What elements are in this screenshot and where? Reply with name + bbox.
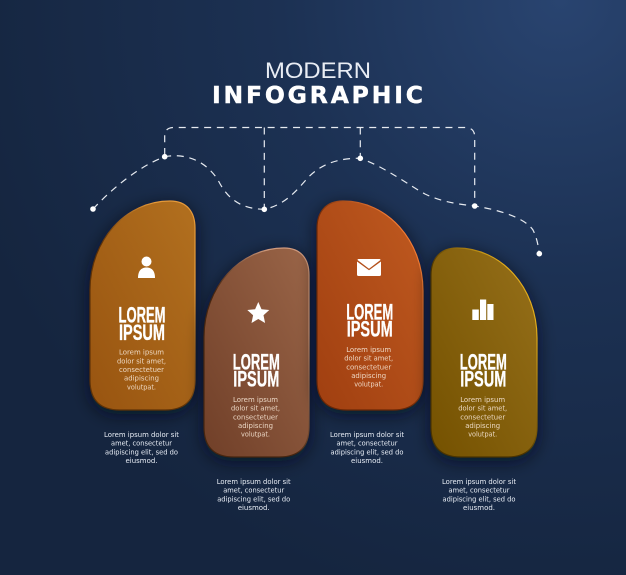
title line: INFOGRAPHIC: INFOGRAPHIC	[212, 81, 423, 109]
title line: MODERN: MODERN	[265, 58, 371, 83]
card 2 heading: LOREM	[233, 349, 280, 374]
panel: card 4	[431, 248, 537, 461]
card 4 heading: IPSUM	[460, 367, 506, 392]
caption under card 2: Lorem ipsum dolor sit	[217, 477, 291, 486]
card 3 heading: LOREM	[346, 299, 393, 324]
card 1 heading: IPSUM	[119, 320, 165, 345]
card 2 heading	[233, 349, 280, 392]
card 1 heading	[118, 303, 166, 345]
caption under card 4: Lorem ipsum dolor sit	[442, 477, 516, 486]
caption under card 4: adipiscing elit, sed do	[442, 494, 516, 503]
caption under card 2: eiusmod.	[238, 503, 270, 512]
caption under card 3	[330, 430, 404, 465]
icon: envelope	[357, 259, 381, 276]
caption under card 2: adipiscing elit, sed do	[217, 494, 290, 503]
card 1 body text: consectetuer	[119, 365, 164, 374]
caption under card 4: eiusmod.	[463, 503, 495, 512]
timeline dots	[90, 154, 542, 256]
caption under card 3: eiusmod.	[351, 456, 383, 465]
caption under card 1	[104, 430, 179, 465]
card 4 body text: volutpat.	[468, 430, 497, 439]
card 3 body text	[344, 345, 393, 389]
caption under card 4	[442, 477, 516, 512]
card 3 body text: Lorem ipsum	[346, 345, 391, 354]
card 1 body text: volutpat.	[127, 382, 156, 391]
panel: card 2	[204, 248, 309, 461]
card 1 body text: adipiscing	[124, 374, 159, 383]
card 2 heading: IPSUM	[233, 367, 279, 392]
card 3 body text: consectetuer	[346, 362, 391, 371]
caption under card 3: amet, consectetur	[336, 439, 398, 448]
caption under card 1: Lorem ipsum dolor sit	[104, 430, 179, 439]
card 4 body text: consectetuer	[460, 412, 505, 421]
panel: card 3	[317, 201, 423, 414]
card 4 body text: adipiscing	[465, 421, 500, 430]
card 4 body text	[458, 395, 507, 439]
caption under card 3: adipiscing elit, sed do	[330, 447, 404, 456]
caption under card 1: eiusmod.	[126, 456, 158, 465]
card 2 body text: adipiscing	[238, 421, 273, 430]
card 4 body text: dolor sit amet,	[458, 404, 507, 413]
card 2 body text: dolor sit amet,	[231, 404, 280, 413]
icon: star	[247, 302, 269, 323]
card 4 heading: LOREM	[460, 349, 507, 374]
icon: bar chart	[472, 300, 494, 320]
caption under card 2	[217, 477, 291, 512]
card 2 body text: consectetuer	[233, 412, 278, 421]
card 1 body text: Lorem ipsum	[119, 348, 164, 357]
card 2 body text: Lorem ipsum	[233, 395, 278, 404]
card 1 body text: dolor sit amet,	[117, 356, 166, 365]
card 3 body text: volutpat.	[354, 380, 383, 389]
icon: person	[138, 256, 155, 278]
card 4 heading	[460, 349, 507, 392]
caption under card 3: Lorem ipsum dolor sit	[330, 430, 404, 439]
card 2 body text	[231, 395, 280, 439]
card 3 heading	[346, 299, 393, 342]
card 1 heading: LOREM	[118, 303, 166, 328]
caption under card 1: adipiscing elit, sed do	[105, 447, 178, 456]
card 2 body text: volutpat.	[241, 430, 270, 439]
card 3 heading: IPSUM	[347, 317, 393, 342]
card 3 body text: dolor sit amet,	[344, 354, 393, 363]
panel: card 1	[90, 201, 195, 414]
title	[212, 58, 423, 109]
caption under card 4: amet, consectetur	[448, 486, 510, 495]
card 3 body text: adipiscing	[351, 371, 386, 380]
caption under card 1: amet, consectetur	[111, 439, 172, 448]
dashed timeline curve	[93, 156, 539, 254]
card 4 body text: Lorem ipsum	[460, 395, 505, 404]
card 1 body text	[117, 348, 166, 391]
caption under card 2: amet, consectetur	[223, 486, 284, 495]
dashed connector bracket	[165, 128, 475, 209]
